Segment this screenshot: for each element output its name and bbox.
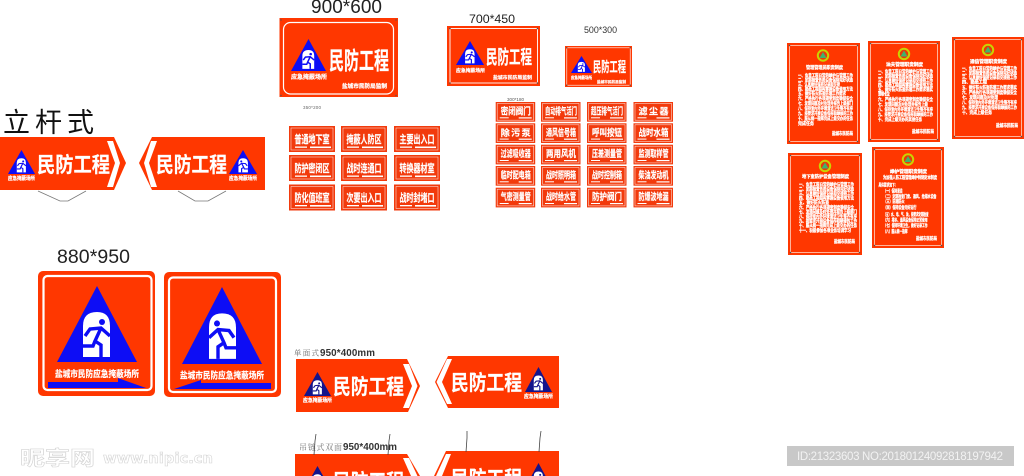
sign: pole mounted right arrow: 民防工程 (37, 154, 110, 177)
panel: regulation board 2: 到位 (878, 90, 891, 96)
sign grid: 300*180 equipment signs: 战时给水管 (546, 191, 576, 203)
sign: 700*450: 盐城市民防局监制 (493, 74, 532, 81)
panel: regulation board 2 (868, 41, 940, 142)
size label 300*180: 300*180 (507, 97, 524, 102)
panel: regulation board 2: 四、熟悉工程结构掌握设备使用方法 (878, 82, 933, 88)
watermark: site logo: 昵享网 (20, 447, 95, 470)
sign grid: 300*180 equipment signs: 超压排气活门 (591, 106, 623, 118)
panel: regulation board 2: 七、发现问题及时处理并报告上级 (878, 101, 928, 108)
panel: regulation board 3: 七、发现问题及时处理 (962, 94, 998, 101)
panel: regulation board 4: 四、熟悉工程结构掌握设备使用方法 (799, 194, 854, 202)
panel: regulation board 1 (787, 43, 860, 144)
panel: regulation board 1: 五、做好防火防盗防潮工作要求 (798, 90, 846, 97)
panel: regulation board 2: 二、定期检查各类设备保持完好状态 (878, 72, 933, 80)
sign: 700*450: 民防工程 (486, 46, 532, 68)
panel: regulation board 4: 二、定期检查各类设备保持完好状态 (799, 186, 854, 192)
sign: hanging left arrow (434, 451, 559, 476)
sign grid: 300*180 equipment signs: 压差测量管 (592, 148, 622, 160)
sign: single sided right arrow: 应急掩蔽场所 (303, 397, 332, 404)
size label 700*450: 700*450 (469, 12, 515, 26)
panel: regulation board 5: 维护管理职责制度 (890, 168, 928, 175)
sign grid: 300*180 equipment signs: 临时配电箱 (501, 170, 531, 182)
hanging wires (314, 431, 541, 455)
image id bar: ID:21323603 NO:20180124092818197942 (797, 451, 1003, 463)
pole brackets (38, 191, 226, 201)
sign grid: 300*180 equipment signs: 滤尘器 (638, 106, 668, 116)
panel: regulation board 4: 五、做好防火防盗 (799, 199, 830, 206)
sign: 700*450 (447, 26, 540, 86)
panel: regulation board 1: 七、发现问题及时处理并报告上级部门 (798, 100, 853, 107)
sign: hanging right arrow (295, 454, 420, 476)
panel: regulation board 3: 四、熟悉工程 (962, 78, 988, 86)
panel: regulation board 4: 十、服从统一指挥完成上级交办的任务 (799, 222, 857, 229)
label: hanging double sided: 吊链式双面 (299, 442, 342, 452)
sign: pole mounted left arrow (139, 137, 265, 190)
sign: square left (38, 271, 155, 396)
panel: regulation board 5: （八）服从统一指挥 (884, 228, 908, 235)
panel: regulation board 5: （四）保持设备完好运行 (884, 204, 917, 211)
panel: regulation board 4: 地下室防护设备管理制度 (802, 173, 850, 180)
panel: regulation board 2: 六、严格执行各项规章制度确保安全 (878, 96, 933, 103)
panel: regulation board 5: 为加强人防工程管理维护特制定本制度 (883, 174, 937, 181)
sign grid: 350*200 room signs: 战时封堵口 (400, 190, 434, 204)
size label 350*200: 350*200 (303, 105, 321, 110)
sign: square right: 盐城市民防应急掩蔽场所 (180, 370, 264, 380)
panel: regulation board 2: 一、负责工程日常的维护与管理工作 (878, 68, 933, 75)
panel: regulation board 1: 盐城市民防局 (832, 130, 853, 137)
panel: regulation board 1: 三、认真做好值班记录和交接 (798, 81, 840, 88)
sign grid: 350*200 room signs: 掩蔽人防区 (346, 132, 382, 146)
panel: regulation board 1: 一、负责工程日常的维护与管理工作 (798, 72, 853, 79)
sign: single sided left arrow: 民防工程 (451, 372, 522, 395)
panel: regulation board 1: 二、定期检查各类设备保持完好状态 (798, 76, 853, 84)
panel: regulation board 1: 四、熟悉工程结构掌握设备使用方法 (798, 86, 853, 92)
panel: regulation board 1: 九、按要求开展设备保养和维修的工作 (798, 110, 853, 117)
sign: 700*450: 应急掩蔽场所 (456, 67, 485, 74)
sign grid: 300*180 equipment signs: 战时照明箱 (546, 170, 576, 182)
sign: 500*300: 盐城市民防局监制 (597, 79, 626, 84)
sign: 900*600: 盐城市民防局监制 (342, 82, 387, 90)
sign grid: 300*180 equipment signs: 防护阀门 (592, 191, 622, 203)
sign grid: 350*200 room signs: 转换器材室 (400, 161, 434, 175)
sign: 500*300: 民防工程 (593, 59, 626, 75)
sign grid: 300*180 equipment signs: 气密测量管 (501, 191, 531, 203)
panel: regulation board 2: 盐城市民防局 (912, 128, 934, 135)
panel: regulation board 4: 十一、积极参加各项业务培训学习 (799, 227, 851, 234)
panel: regulation board 5: （七）保持环境卫生，做好记录工作 (884, 222, 928, 229)
panel: regulation board 1: 八、保持室内外环境清洁卫生整齐有序 (798, 105, 853, 112)
panel: regulation board 3: 通信管理职责制度 (970, 58, 1008, 65)
sign: 900*600 (280, 18, 398, 97)
panel: regulation board 2: 九、按要求开展设备保养和维修的工作 (878, 111, 933, 118)
watermark: site logo: www.nipic.cn (103, 451, 213, 467)
sign grid: 300*180 equipment signs: 除污泵 (501, 127, 531, 138)
panel: regulation board 4: 一、负责工程日常的维护与管理工作 (799, 181, 854, 188)
sign: pole mounted left arrow: 民防工程 (156, 154, 227, 177)
panel: regulation board 5: （一）保持清洁 (884, 188, 903, 194)
sign grid: 300*180 equipment signs: 呼叫按钮 (592, 127, 622, 139)
watermark: site logo (20, 447, 213, 470)
sign grid: 300*180 equipment signs: 监测取样管 (638, 148, 669, 160)
sign grid: 300*180 equipment signs (496, 102, 673, 207)
sign: pole mounted right arrow (0, 137, 126, 190)
sign grid: 300*180 equipment signs: 防爆波地漏 (638, 191, 669, 203)
panel: regulation board 2: 油夫管理职责制度 (886, 61, 924, 68)
label: single sided: 950*400mm (320, 348, 375, 359)
label: hanging double sided (299, 442, 397, 453)
sign: single sided left arrow: 应急掩蔽场所 (524, 393, 553, 400)
sign: 900*600: 民防工程 (329, 48, 389, 75)
sign: single sided left arrow (435, 356, 559, 408)
sign: pole mounted left arrow: 应急掩蔽场所 (229, 175, 257, 182)
panel: regulation board 4: 三、认真做好值班记录和交接班工作 (799, 190, 854, 197)
panel: regulation board 2: 十、完成上级交办的其他任务 (878, 116, 922, 123)
label: hanging double sided: 950*400mm (343, 442, 397, 453)
panel: regulation board 1: 十、服从统一指挥完成上级交办的任务 (798, 115, 853, 122)
sign grid: 350*200 room signs: 主要出入口 (400, 132, 434, 146)
panel: regulation board 3: 十、完成上级任务 (962, 109, 993, 116)
label: single sided (294, 348, 375, 359)
sign: 500*300: 应急掩蔽场所 (571, 74, 592, 80)
size label 880*950: 880*950 (57, 246, 130, 268)
panel: regulation board 5: （五）水、电、气、油，按要求定期检查 (884, 211, 929, 218)
heading: pole mounted style: 立杆式 (3, 108, 94, 138)
sign grid: 300*180 equipment signs: 两用风机 (546, 148, 576, 160)
sign grid: 300*180 equipment signs: 战时控制箱 (592, 170, 622, 182)
sign grid: 300*180 equipment signs: 过滤吸收器 (501, 148, 531, 160)
panel: regulation board 2: 三、认真做好值班记录和交接班工作 (878, 77, 933, 84)
sign grid: 350*200 room signs (289, 126, 440, 210)
panel: regulation board 2: 五、做好防火防盗防潮工作要求落实 (878, 86, 933, 93)
panel: regulation board 4: 七、发现问题及时处理并报告上级部门 (799, 208, 857, 216)
sign: pole mounted right arrow: 应急掩蔽场所 (8, 175, 35, 182)
sign: single sided right arrow: 民防工程 (333, 376, 404, 399)
panel: regulation board 1: 完成任务 (798, 120, 815, 127)
panel: regulation board 3 (952, 37, 1024, 139)
panel: regulation board 3: 盐城市民防局 (996, 122, 1018, 129)
panel: regulation board 4: 八、保持室内外环境清洁卫生整齐有序 (799, 213, 857, 220)
sign grid: 300*180 equipment signs: 柴油发动机 (638, 170, 669, 182)
size label 500*300: 500*300 (584, 25, 617, 35)
sign: square left: 盐城市民防应急掩蔽场所 (55, 368, 139, 379)
panel: regulation board 5 (872, 147, 944, 248)
sign grid: 300*180 equipment signs: 自动排气活门 (545, 106, 577, 118)
panel: regulation board 4: 盐城市民防局 (834, 238, 855, 245)
panel: regulation board 5: 盐城市民防局 (916, 235, 937, 242)
panel: regulation board 1: 管理管理员职责制度 (806, 64, 844, 71)
sign: square right (164, 272, 281, 397)
sign grid: 300*180 equipment signs: 密闭阀门 (501, 106, 531, 118)
sign: 900*600: 应急掩蔽场所 (291, 73, 327, 81)
panel: regulation board 1: 六、严格执行各项规章制度确保安全 (798, 95, 853, 102)
sign grid: 350*200 room signs: 普通地下室 (294, 132, 330, 146)
panel: regulation board 5: （三）防潮防火 (884, 198, 905, 205)
image id bar (787, 446, 1014, 466)
sign grid: 300*180 equipment signs: 战时水箱 (638, 127, 669, 139)
sign: single sided right arrow (296, 359, 420, 412)
sign grid: 350*200 room signs: 次要出入口 (346, 190, 382, 204)
panel: regulation board 4: 六、严格执行各项规章制度确保安全 (799, 204, 854, 211)
label: single sided: 单面式 (294, 348, 320, 358)
panel: regulation board 4: 九、按要求开展设备保养和维修的工作 (799, 218, 857, 224)
sign: 500*300 (565, 46, 632, 87)
panel: regulation board 5: （六）排水、通风设备保持正常使用 (884, 216, 928, 224)
sign grid: 350*200 room signs: 战时连通口 (346, 161, 382, 175)
sign grid: 350*200 room signs: 防化值班室 (294, 190, 330, 204)
panel: regulation board 5: （二）定期检查门窗、通风、给排水设备 (884, 193, 937, 200)
panel: regulation board 4 (788, 153, 862, 255)
panel: regulation board 5: 具体要求如下： (878, 182, 898, 188)
sign grid: 350*200 room signs: 防护密闭区 (294, 161, 330, 175)
panel: regulation board 2: 八、保持室内外环境清洁卫生整齐有序 (878, 106, 933, 113)
sign grid: 300*180 equipment signs: 通风信号箱 (546, 127, 576, 139)
